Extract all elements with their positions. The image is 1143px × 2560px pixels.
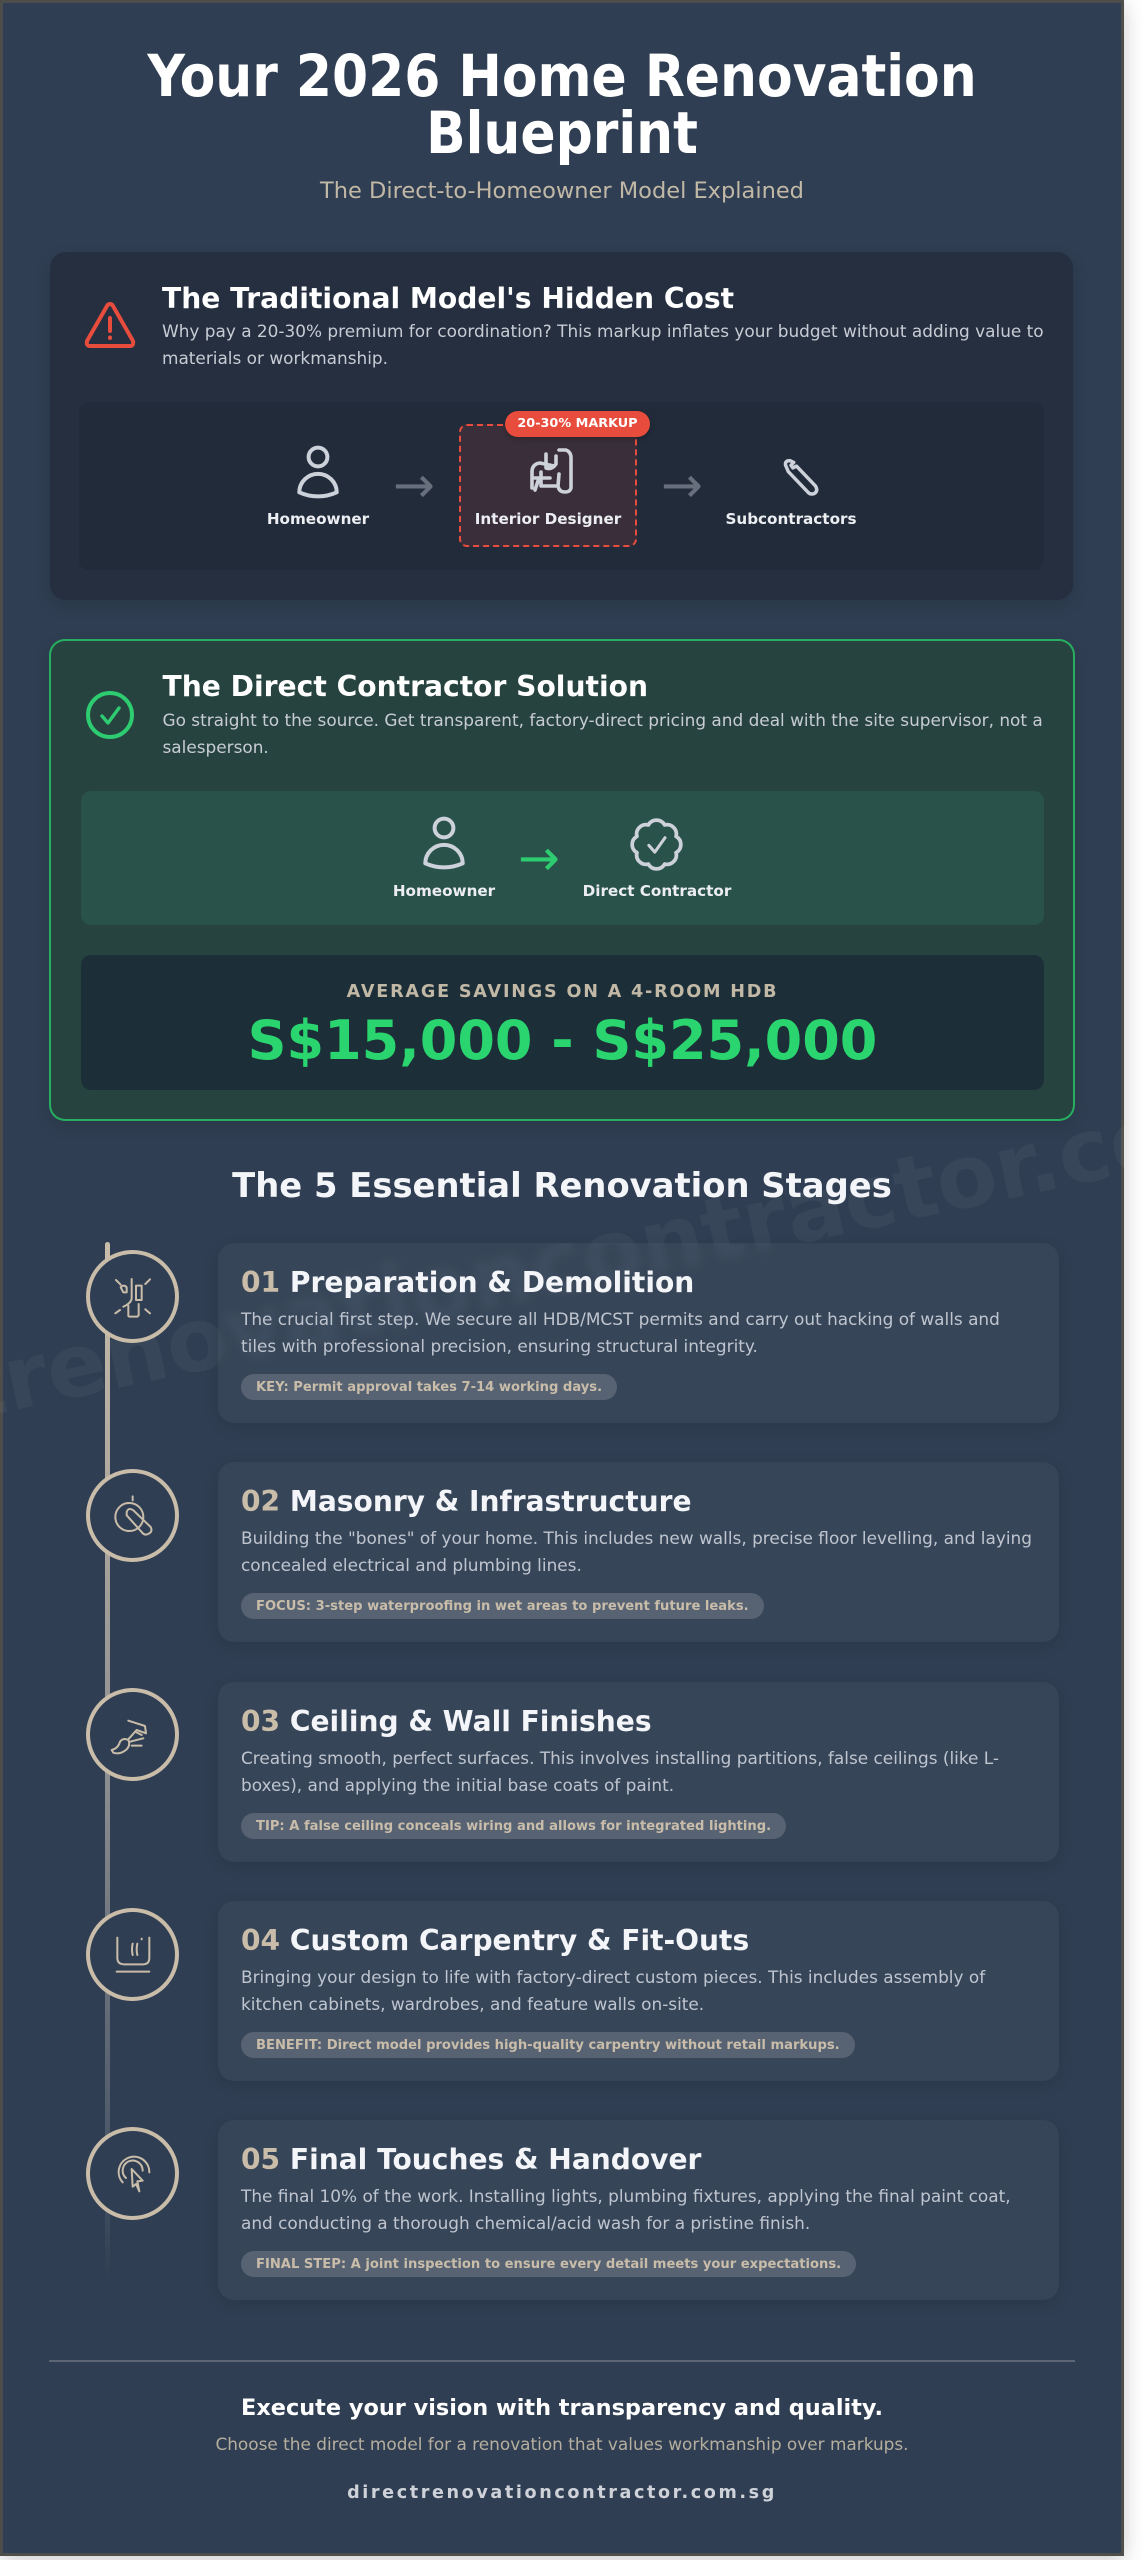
callout: savings xyxy=(81,955,1044,1090)
text: traditional description xyxy=(162,321,1044,368)
icon: homeowner xyxy=(297,446,339,498)
icon: demolition xyxy=(86,1250,179,1342)
panel: traditional model xyxy=(50,252,1073,600)
stage title: 01 Preparation & Demolition xyxy=(241,1266,694,1299)
stage tag xyxy=(241,1374,617,1400)
stage title: 02 Masonry & Infrastructure xyxy=(241,1485,692,1518)
icon: homeowner xyxy=(423,816,465,870)
stage description: Bringing your design to life with factory-direct custom pieces. This includes assembly of xyxy=(241,1967,985,1987)
icon: carpentry xyxy=(86,1908,179,2001)
arrow: → xyxy=(661,456,703,514)
icon: paint brush xyxy=(86,1688,179,1781)
subtitle: The Direct-to-Homeowner Model Explained xyxy=(320,178,804,204)
heading: direct contractor: The Direct Contractor Solution xyxy=(162,670,648,703)
stage description xyxy=(241,1528,1032,1575)
stage description: The final 10% of the work. Installing lights, plumbing fixtures, applying the final paint coat, xyxy=(241,2186,1011,2206)
card: stage 04 xyxy=(218,1901,1059,2081)
stage tag xyxy=(241,1593,764,1619)
icon: contractor badge xyxy=(630,818,683,871)
stage description: and conducting a thorough chemical/acid wash for a pristine finish. xyxy=(241,2213,810,2233)
stage tag xyxy=(241,2032,855,2058)
stage description: Creating smooth, perfect surfaces. This involves installing partitions, false ceilings (like L- xyxy=(241,1748,999,1768)
icon: subcontractors wrench xyxy=(784,458,818,496)
stage tag: KEY: Permit approval takes 7-14 working days. xyxy=(256,1380,602,1395)
card: stage 02 xyxy=(218,1462,1059,1642)
footer text: Choose the direct model for a renovation that values workmanship over markups. xyxy=(215,2434,909,2454)
stage description: concealed electrical and plumbing lines. xyxy=(241,1555,582,1575)
stage tag: FOCUS: 3-step waterproofing in wet areas to prevent future leaks. xyxy=(256,1599,749,1614)
stage 03 xyxy=(86,1686,1052,1858)
title xyxy=(146,42,977,167)
stage description xyxy=(240,2186,1011,2233)
stage tag: TIP: A false ceiling conceals wiring and allows for integrated lighting. xyxy=(256,1819,771,1834)
heading: traditional model: The Traditional Model's Hidden Cost xyxy=(162,282,734,315)
stage tag xyxy=(241,2251,856,2277)
flow diagram: direct xyxy=(81,791,1044,925)
label: direct contractor: Direct Contractor xyxy=(583,882,731,900)
badge: markup xyxy=(505,411,650,437)
stage title: 05 Final Touches & Handover xyxy=(241,2143,701,2176)
title: Blueprint xyxy=(426,99,698,167)
stage 01 xyxy=(86,1243,1052,1418)
label: savings: AVERAGE SAVINGS ON A 4-ROOM HDB xyxy=(347,982,778,1002)
stage tag xyxy=(241,1813,786,1839)
stage description xyxy=(241,1748,999,1795)
card: stage 05 xyxy=(218,2120,1059,2300)
text: direct description: Go straight to the source. Get transparent, factory-direct pricing and deal with the site supervisor, not a xyxy=(162,710,1043,730)
stage tag: BENEFIT: Direct model provides high-quality carpentry without retail markups. xyxy=(256,2038,840,2053)
label: interior designer: Interior Designer xyxy=(475,510,621,528)
icon: check circle xyxy=(86,691,134,739)
flow diagram: traditional xyxy=(79,402,1044,570)
stage description: tiles with professional precision, ensuring structural integrity. xyxy=(241,1336,758,1356)
icon: cursor touch xyxy=(86,2126,179,2220)
icon: masonry xyxy=(86,1469,179,1562)
stage title: 04 Custom Carpentry & Fit-Outs xyxy=(241,1924,749,1957)
text: traditional description: materials or workmanship. xyxy=(162,348,388,368)
timeline line xyxy=(105,1242,110,2285)
stage description xyxy=(240,1309,1000,1356)
label: homeowner: Homeowner xyxy=(393,882,495,900)
footer headline: Execute your vision with transparency and quality. xyxy=(241,2395,883,2421)
card: stage 03 xyxy=(218,1682,1059,1862)
stage description: kitchen cabinets, wardrobes, and feature walls on-site. xyxy=(241,1994,704,2014)
card: stage 01 xyxy=(218,1243,1059,1423)
icon: interior designer xyxy=(530,448,573,494)
arrow: green: → xyxy=(518,829,560,887)
stage description: boxes), and applying the initial base coats of paint. xyxy=(241,1775,674,1795)
text: direct description: salesperson. xyxy=(162,737,269,757)
label: subcontractors: Subcontractors xyxy=(725,510,857,528)
footer xyxy=(49,2360,1075,2510)
icon: warning triangle xyxy=(84,302,136,348)
stage description: The crucial first step. We secure all HDB/MCST permits and carry out hacking of walls and xyxy=(241,1309,1000,1329)
website: directrenovationcontractor.com.sg xyxy=(347,2483,777,2503)
stage description: Building the "bones" of your home. This includes new walls, precise floor levelling, and laying xyxy=(241,1528,1032,1548)
label: homeowner: Homeowner xyxy=(267,510,369,528)
badge: markup: 20-30% MARKUP xyxy=(517,416,638,431)
stage 02 xyxy=(86,1466,1052,1638)
text: direct description xyxy=(162,710,1043,757)
arrow: → xyxy=(393,456,435,514)
title: Your 2026 Home Renovation xyxy=(147,42,977,110)
box: interior designer markup xyxy=(459,424,637,547)
stage 04 xyxy=(86,1906,1052,2076)
text: traditional description: Why pay a 20-30% premium for coordination? This markup inflates your budget without adding value to xyxy=(162,321,1044,341)
panel: direct contractor xyxy=(49,639,1074,1121)
stage tag: FINAL STEP: A joint inspection to ensure every detail meets your expectations. xyxy=(256,2257,841,2272)
number: savings range: S$15,000 - S$25,000 xyxy=(248,1009,877,1072)
heading: stages: The 5 Essential Renovation Stages xyxy=(232,1166,892,1205)
stage 05 xyxy=(86,2124,1052,2296)
stage title: 03 Ceiling & Wall Finishes xyxy=(241,1705,652,1738)
stage description xyxy=(241,1967,986,2014)
